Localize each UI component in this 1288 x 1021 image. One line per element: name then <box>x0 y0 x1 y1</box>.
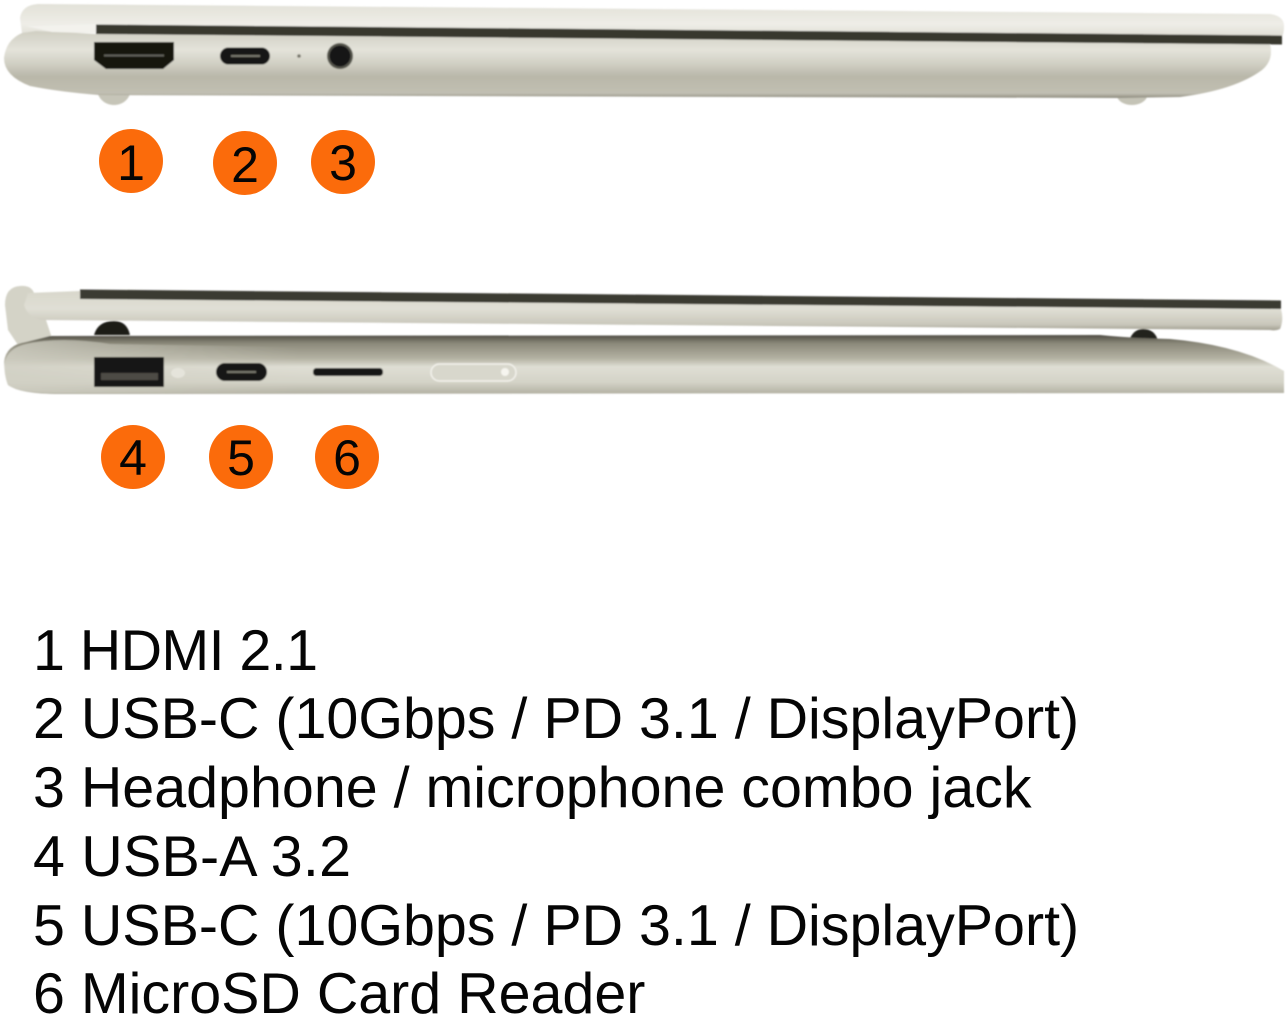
LED <box>297 54 301 58</box>
hinge <box>5 286 52 348</box>
port: headphone jack <box>327 43 353 69</box>
power button <box>431 364 516 381</box>
power button LED <box>501 368 509 376</box>
badge 1 <box>99 129 163 193</box>
lid hinge highlight <box>26 24 96 33</box>
rubber foot: right <box>1117 97 1147 105</box>
port: HDMI inner <box>104 54 164 56</box>
port: USB-C tongue <box>227 371 256 373</box>
legend item 3: 3 Headphone / microphone combo jack <box>33 756 1032 820</box>
hinge foot <box>94 321 130 335</box>
badge 2 <box>213 131 277 195</box>
badge 3 <box>311 130 375 194</box>
base body <box>4 335 1284 394</box>
display edge: dark strip <box>96 24 1282 44</box>
port: HDMI <box>94 42 174 69</box>
port: microSD <box>313 368 383 376</box>
port: USB-C tongue <box>231 55 260 57</box>
port: USB-A tongue <box>101 373 158 380</box>
legend item 1: 1 HDMI 2.1 <box>33 619 318 683</box>
badge 4: 4 <box>119 430 147 486</box>
base left shoulder <box>5 340 300 393</box>
LED <box>171 368 185 378</box>
orange badges: bottom row <box>101 425 379 489</box>
port: USB-C <box>216 363 267 381</box>
display edge: dark strip <box>80 290 1281 309</box>
legend item 2: 2 USB-C (10Gbps / PD 3.1 / DisplayPort) <box>33 687 1079 751</box>
foot right <box>1129 329 1158 341</box>
legend item 4: 4 USB-A 3.2 <box>33 825 351 889</box>
port: USB-C <box>220 48 270 64</box>
badge 4 <box>101 425 165 489</box>
port: USB-A <box>94 357 164 387</box>
badge 5: 5 <box>227 430 255 486</box>
badge 5 <box>209 425 273 489</box>
badge 6 <box>315 425 379 489</box>
port legend <box>33 619 1079 1021</box>
badge 3: 3 <box>329 135 357 191</box>
laptop side view: open, right-side ports <box>4 286 1284 394</box>
laptop side view: closed, left ports <box>4 4 1284 105</box>
lid <box>20 4 1284 44</box>
base body <box>4 31 1271 98</box>
badge 1: 1 <box>117 135 145 191</box>
badge 2: 2 <box>231 137 259 193</box>
lid edge <box>24 291 1282 330</box>
legend item 5: 5 USB-C (10Gbps / PD 3.1 / DisplayPort) <box>33 894 1079 958</box>
orange badges: top row <box>99 129 375 195</box>
rubber foot: left <box>98 94 130 105</box>
badge 6: 6 <box>333 430 361 486</box>
